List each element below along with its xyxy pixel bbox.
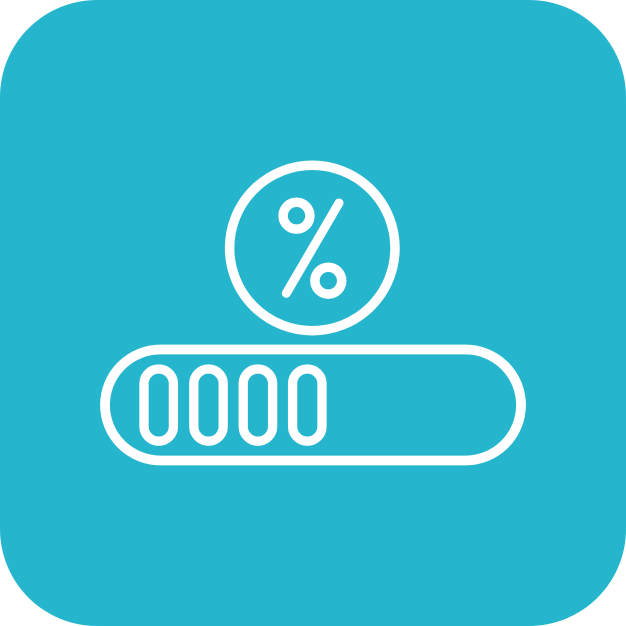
progress segment 4: [293, 369, 322, 441]
icon: percent circle: [230, 165, 395, 331]
bar outline: [105, 350, 521, 460]
progress segment 3: [243, 369, 273, 441]
progress segment 1: [144, 369, 173, 441]
progress segment 2: [194, 369, 223, 441]
progress bar: [105, 350, 521, 460]
